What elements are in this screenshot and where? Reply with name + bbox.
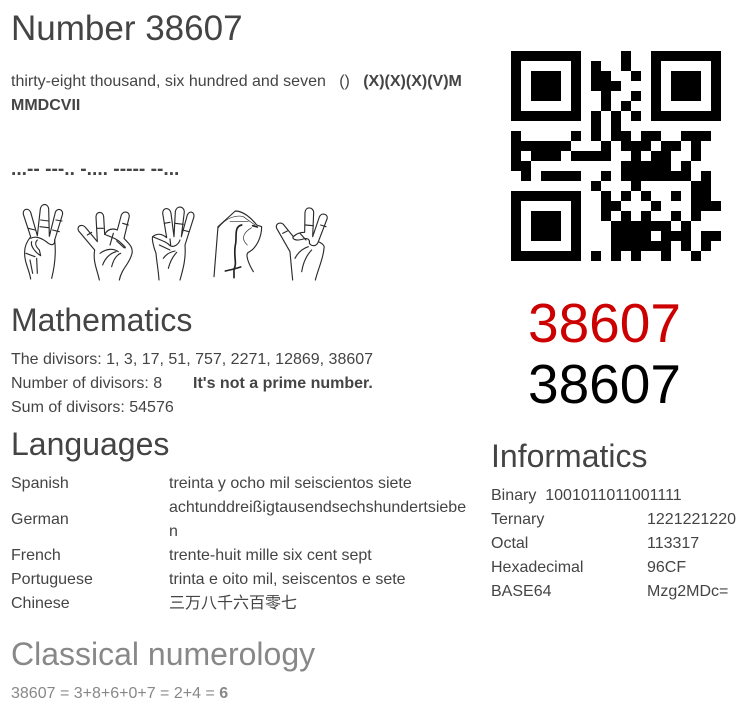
value: BASE64: Mzg2MDc= — [647, 583, 728, 600]
heading: Informatics: Informatics — [491, 438, 647, 474]
number of divisors: Number of divisors: 8 — [11, 375, 162, 392]
value: French: trente-huit mille six cent sept — [169, 547, 372, 564]
heading: Languages: Languages — [11, 426, 169, 462]
label: Spanish: Spanish — [11, 475, 69, 492]
large black number: 38607 — [528, 353, 681, 415]
label: Hexadecimal: Hexadecimal — [491, 559, 583, 576]
label: German: German — [11, 511, 69, 528]
label: Portuguese: Portuguese — [11, 571, 93, 588]
number in words and roman numerals: MMDCVII — [11, 97, 80, 114]
value: Spanish: treinta y ocho mil seiscientos siete — [169, 475, 412, 492]
value: Octal: 113317 — [647, 535, 699, 552]
sum of divisors: Sum of divisors: 54576 — [11, 399, 174, 416]
numerology sum: 38607 = 3+8+6+0+7 = 2+4 = 6 — [11, 685, 228, 702]
icon: sign language hands — [22, 204, 328, 281]
title: Number 38607 — [11, 9, 243, 48]
icon: hand digit 7 — [276, 208, 327, 280]
icon: hand digit 8 — [78, 212, 132, 280]
number in words and roman numerals: thirty-eight thousand, six hundred and seven () (X)(X)(X)(V)M — [11, 73, 462, 90]
large red number: 38607 — [528, 292, 681, 354]
languages table — [11, 475, 466, 612]
label: Chinese: Chinese — [11, 595, 70, 612]
value: Chinese: 三万八千六百零七 — [169, 595, 297, 612]
icon: hand digit 6 — [152, 207, 194, 280]
value: German: achtunddreißigtausendsechshundertsiebe — [169, 499, 466, 516]
binary row: Binary 1001011011001111 — [491, 487, 682, 504]
value: Ternary: 1221221220 — [647, 511, 736, 528]
value: German — [169, 499, 466, 540]
heading: Mathematics: Mathematics — [11, 302, 192, 338]
label: Ternary: Ternary — [491, 511, 544, 528]
QR code — [511, 51, 721, 261]
morse code: ...-- ---.. -.... ----- --... — [11, 159, 179, 180]
divisors list: The divisors: 1, 3, 17, 51, 757, 2271, 12869, 38607 — [11, 351, 373, 368]
label: BASE64: BASE64 — [491, 583, 551, 600]
value: German: n — [169, 523, 178, 540]
heading: Classical numerology: Classical numerology — [11, 636, 315, 672]
label: Octal: Octal — [491, 535, 528, 552]
icon: hand digit 0 — [214, 211, 262, 278]
value: Portuguese: trinta e oito mil, seiscentos e sete — [169, 571, 406, 588]
prime note: It's not a prime number. — [193, 375, 373, 392]
value: Hexadecimal: 96CF — [647, 559, 686, 576]
number in words and roman numerals — [11, 73, 462, 114]
icon: hand digit 3 — [23, 204, 63, 279]
label: French: French — [11, 547, 61, 564]
